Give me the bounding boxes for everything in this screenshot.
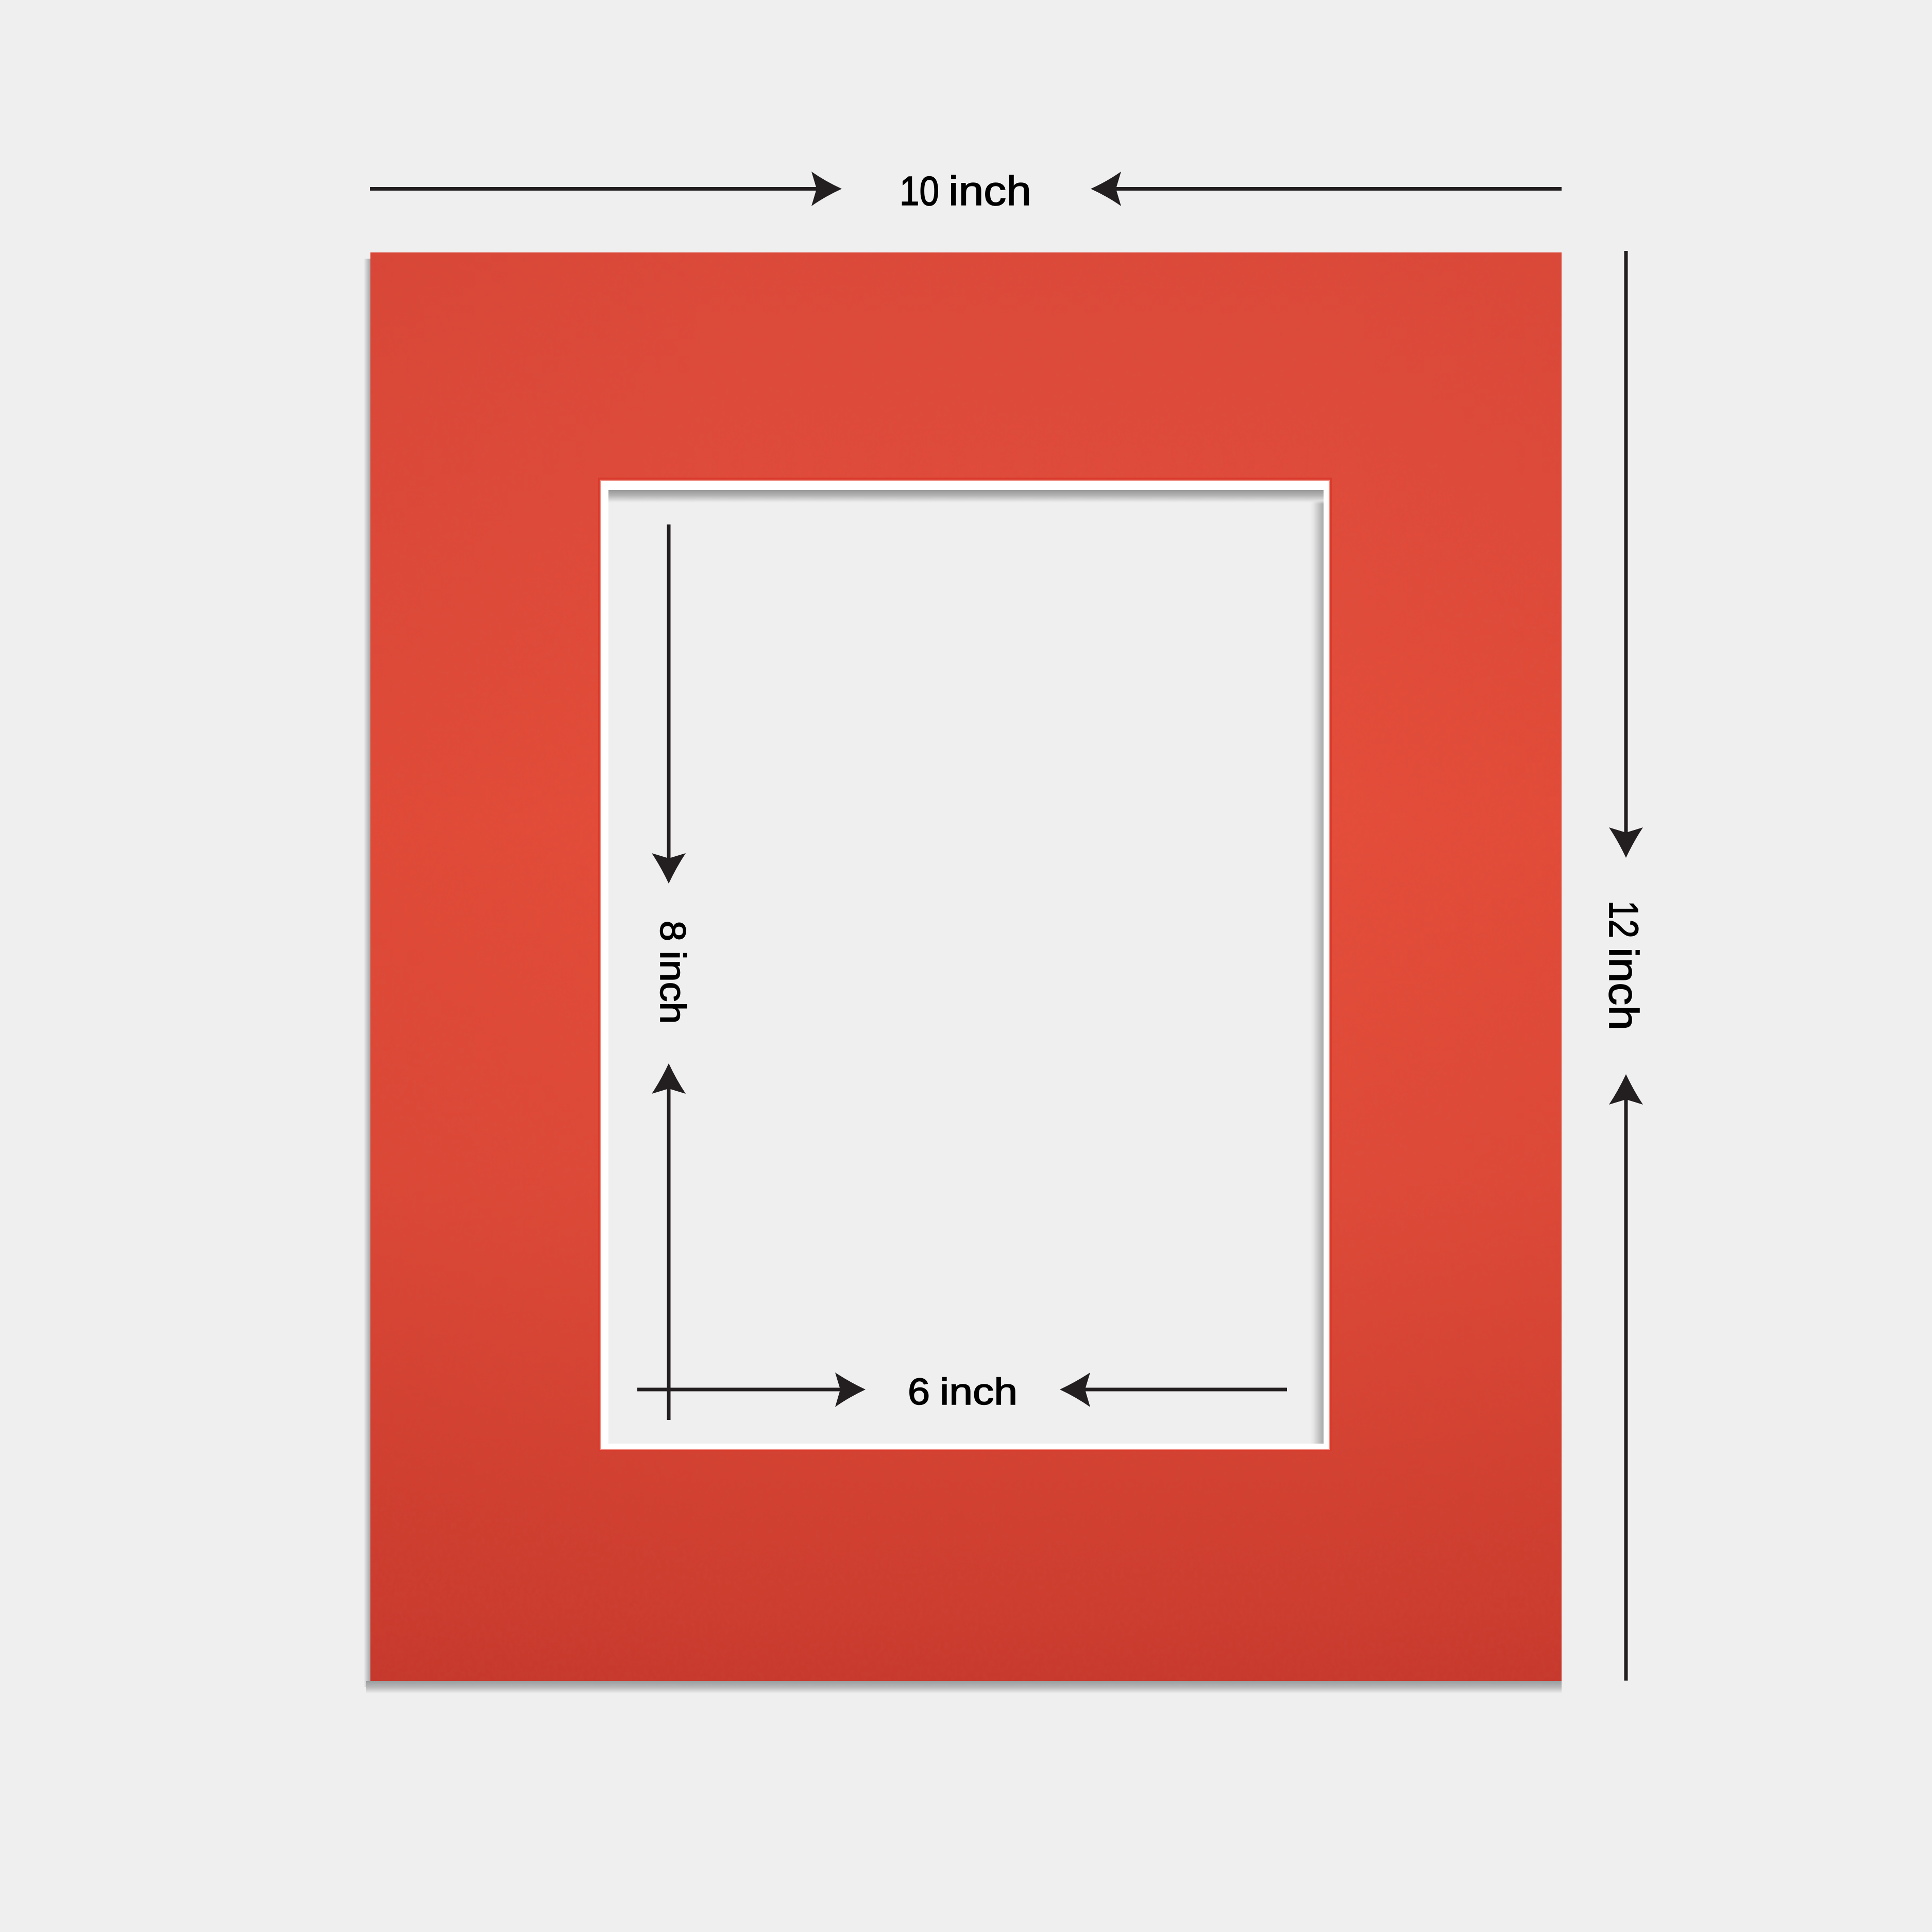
arrow: inner pointing down bbox=[652, 524, 686, 884]
label: 6 inch bbox=[908, 1371, 1018, 1413]
arrow: right side pointing up bbox=[1609, 1074, 1643, 1681]
dimension: window height 8 inch bbox=[652, 524, 693, 1420]
label: 6 inch: inch bbox=[940, 1371, 1018, 1413]
arrow: right side pointing down bbox=[1609, 251, 1643, 858]
arrow: top left pointing right bbox=[370, 172, 842, 206]
label: 8 inch: 8 bbox=[653, 921, 693, 941]
label: 10 inch: inch bbox=[948, 168, 1031, 214]
label: 12 inch: 12 bbox=[1601, 901, 1647, 938]
dimension: overall height 12 inch bbox=[1601, 251, 1647, 1681]
label: 10 inch bbox=[900, 168, 1031, 214]
arrow: inner pointing up bbox=[652, 1063, 686, 1420]
label: 8 inch: inch bbox=[653, 951, 693, 1024]
dimension: overall width 10 inch bbox=[370, 168, 1562, 214]
arrow: top right pointing left bbox=[1091, 172, 1562, 206]
mat board drop shadow bbox=[364, 259, 1562, 1693]
label: 12 inch bbox=[1601, 901, 1647, 1030]
label: 10 inch: 10 bbox=[900, 168, 939, 214]
dimension: window width 6 inch bbox=[637, 1371, 1287, 1413]
window cut-out bevel bbox=[598, 478, 1332, 1451]
label: 6 inch: 6 bbox=[908, 1371, 930, 1413]
label: 12 inch: inch bbox=[1601, 947, 1647, 1030]
mat board surface bbox=[370, 252, 1562, 1681]
arrow: inner pointing right bbox=[637, 1372, 866, 1407]
label: 8 inch bbox=[653, 921, 693, 1024]
panel: red mat board bbox=[364, 252, 1562, 1693]
arrow: inner pointing left bbox=[1060, 1372, 1287, 1407]
